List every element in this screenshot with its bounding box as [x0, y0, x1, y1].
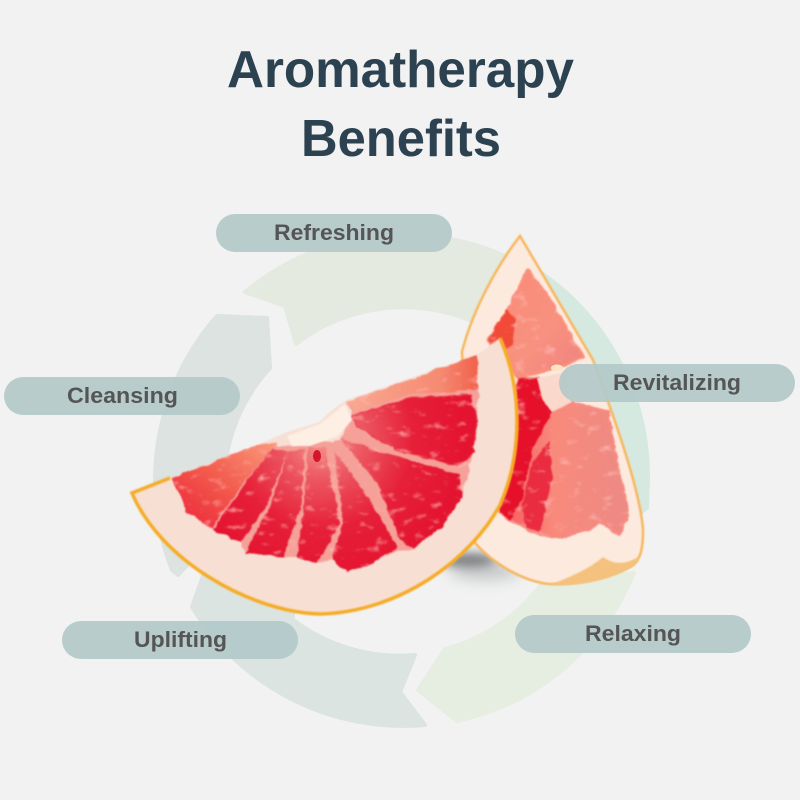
arrow: right segment — [540, 272, 648, 516]
title — [227, 41, 574, 168]
wedge pith — [462, 236, 643, 584]
arrow: left segment — [155, 316, 270, 575]
segment: left — [213, 448, 288, 543]
wedge bottom face — [550, 556, 640, 585]
slice flesh — [172, 355, 479, 572]
wedge deep red area — [495, 378, 552, 520]
fruit shadow — [440, 553, 521, 579]
segment: top pale — [347, 355, 479, 411]
title: Benefits — [301, 110, 501, 168]
label: Cleansing: Cleansing — [67, 383, 178, 408]
slice pith — [132, 338, 517, 614]
wedge flesh — [488, 270, 628, 537]
wedge lower flesh — [495, 378, 628, 537]
arrow: bottom left segment — [192, 570, 425, 726]
segment: centre — [297, 447, 340, 563]
segment: lower red — [332, 452, 397, 572]
grapefruit wedge: right — [462, 236, 643, 585]
label pills — [4, 214, 795, 659]
label texts — [67, 220, 741, 652]
segment: middle red — [340, 438, 462, 548]
pill: Refreshing — [216, 214, 452, 252]
slice rind — [132, 338, 517, 614]
grapefruit slice: front — [132, 338, 517, 614]
arrow: top segment — [245, 234, 525, 344]
label: Relaxing: Relaxing — [585, 621, 681, 646]
wedge upper flesh — [488, 270, 583, 377]
title: Aromatherapy — [227, 41, 574, 99]
pill: Revitalizing — [559, 364, 795, 402]
wedge lower red patch — [522, 440, 552, 533]
label: Revitalizing: Revitalizing — [613, 370, 741, 395]
slice hub — [287, 404, 352, 446]
flesh base — [172, 355, 479, 572]
pill: Relaxing — [515, 615, 751, 653]
circular arrow cycle — [155, 234, 648, 726]
wedge red spot — [488, 310, 516, 352]
arrow: bottom right segment — [418, 573, 634, 721]
segment: upper red — [352, 395, 477, 467]
pill: Uplifting — [62, 621, 298, 659]
segment: centre left — [245, 450, 305, 558]
wedge seed — [551, 364, 563, 372]
wedge hub — [537, 372, 572, 412]
pill: Cleansing — [4, 377, 240, 415]
label: Uplifting: Uplifting — [134, 627, 227, 652]
label: Refreshing: Refreshing — [274, 220, 394, 245]
centre seed — [313, 450, 321, 462]
segment: far left — [172, 443, 277, 528]
